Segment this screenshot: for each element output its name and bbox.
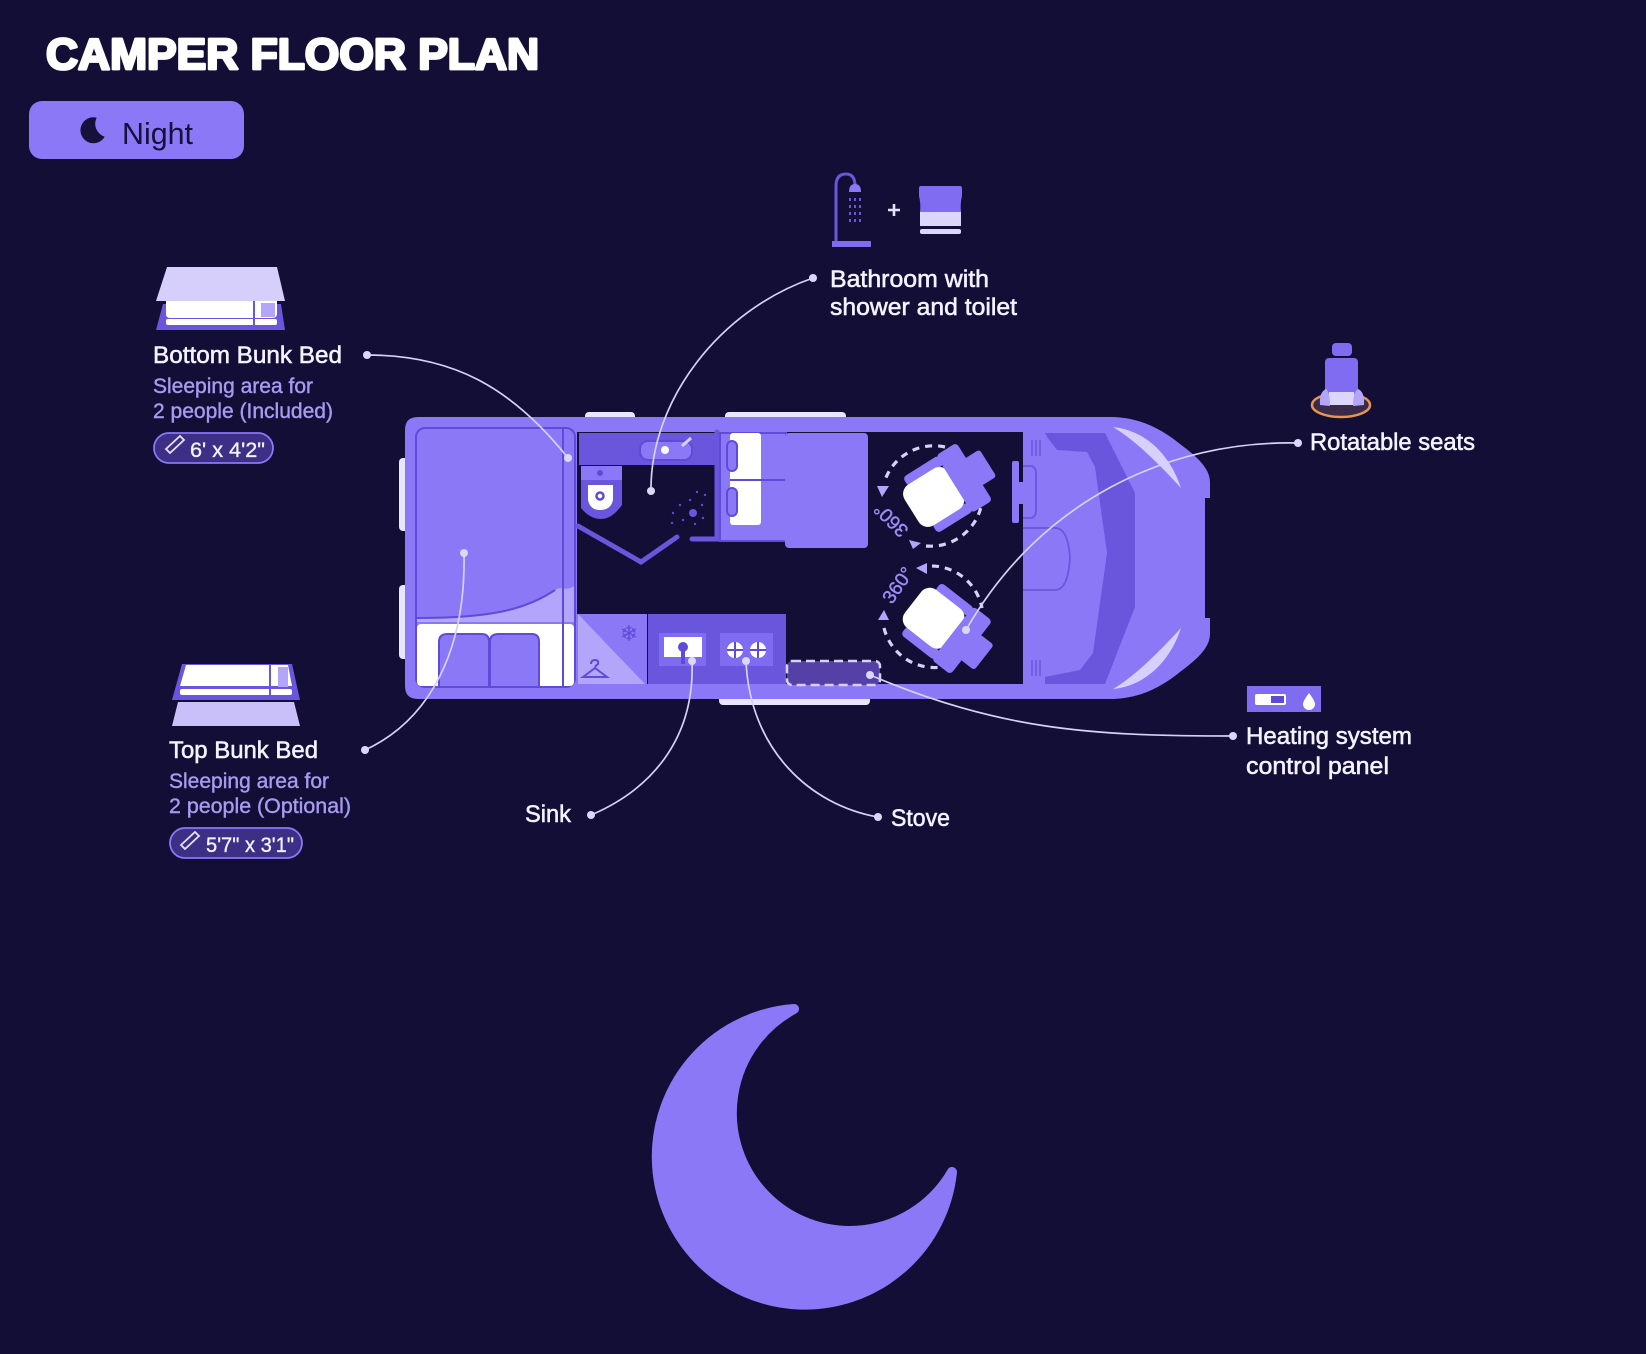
description: [153, 374, 333, 423]
dimension pill: 6' x 4'2": [190, 439, 265, 462]
side windows and trim: [399, 412, 870, 705]
plus sign: [888, 204, 900, 216]
driver cab: [1012, 427, 1181, 689]
rotatable seat lower: [878, 563, 1005, 684]
button label: Night: [122, 116, 193, 151]
callout: stove: Stove: [891, 805, 950, 832]
console and steering: [1023, 528, 1070, 590]
bathroom: [578, 432, 717, 562]
callout: top bunk bed: [169, 664, 351, 858]
wardrobe and fridge: [577, 614, 647, 684]
heading: Top Bunk Bed: [169, 737, 318, 764]
stove: [720, 633, 773, 666]
callout: sink: Sink: [525, 801, 572, 828]
dashboard band: [1045, 433, 1135, 684]
heating control area: [787, 661, 880, 685]
rotation label: 360°: [870, 498, 913, 541]
icon: toilet: [919, 186, 962, 234]
rotation arc: [884, 566, 982, 668]
label: control panel: [1246, 753, 1389, 780]
callout: bottom bunk bed: [153, 267, 342, 463]
label: [830, 266, 1017, 321]
camper floor plan: [399, 412, 1210, 705]
bathroom door: [578, 432, 717, 562]
icon: hanger: [583, 660, 607, 677]
large moon icon: [657, 1009, 952, 1305]
callout: bathroom: [830, 174, 1017, 321]
description: 2 people (Included): [153, 399, 333, 423]
dimension pill: 5'7" x 3'1": [206, 834, 294, 857]
icon: small moon: [81, 118, 104, 143]
seat cushions: [439, 634, 539, 687]
icon: snowflake: ❄: [620, 621, 638, 646]
label: Bathroom with: [830, 266, 989, 293]
icon: control panel: [1247, 686, 1321, 712]
title: CAMPER FLOOR PLAN: [46, 30, 539, 79]
vents: [1032, 440, 1040, 676]
description: 2 people (Optional): [169, 794, 351, 818]
toilet: [581, 466, 622, 519]
icon: top bunk: [172, 664, 300, 726]
label: shower and toilet: [830, 294, 1017, 321]
kitchen counter: [648, 614, 786, 684]
callout: heating system: [1246, 686, 1412, 780]
van body: [405, 417, 1210, 699]
description: Sleeping area for: [153, 374, 313, 398]
rotatable seat upper: [870, 434, 1006, 549]
label: Heating system: [1246, 723, 1412, 750]
dimension pill: [170, 828, 302, 858]
rotation label: 360°: [879, 564, 918, 608]
callout: rotatable seats: [1310, 343, 1475, 456]
sink: [659, 633, 706, 666]
bottom bunk bed: [416, 428, 575, 687]
description: Sleeping area for: [169, 769, 329, 793]
night mode button: [29, 101, 244, 159]
label: Rotatable seats: [1310, 429, 1475, 456]
connector lines: [361, 274, 1302, 821]
windshield highlights: [1113, 427, 1181, 488]
shower: [689, 509, 697, 517]
dimension pill: [154, 433, 273, 463]
heading: Bottom Bunk Bed: [153, 342, 342, 369]
icon: seat: [1312, 343, 1370, 417]
rear bench and table: [720, 433, 868, 548]
label: [1246, 723, 1412, 780]
washbasin counter: [579, 433, 717, 465]
rotation arc: [885, 446, 981, 546]
icon: shower: [832, 174, 871, 247]
description: [169, 769, 351, 818]
icon: bottom bunk: [156, 267, 285, 330]
living area floor: [577, 432, 1023, 684]
